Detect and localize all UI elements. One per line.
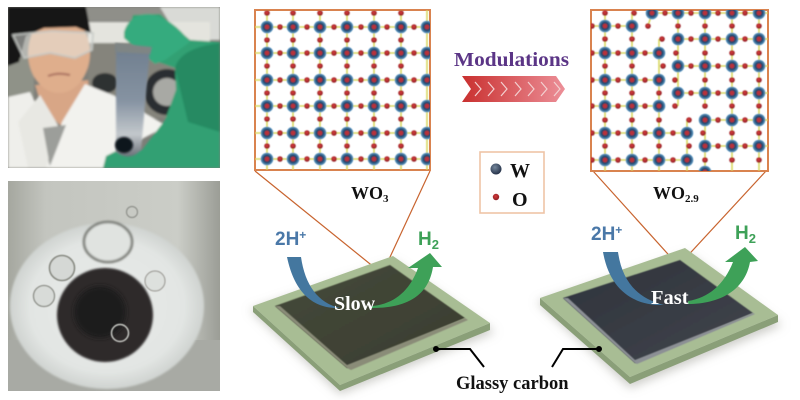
label: H2 left: H <box>418 229 432 250</box>
label: 2H+ right: 2H <box>591 224 615 245</box>
arrow: H2 outgoing slow <box>372 253 442 308</box>
legend: W and O atoms: O <box>512 189 528 211</box>
label: 2H+ left: 2H <box>275 229 299 250</box>
label: WO2.9: WO <box>653 183 685 203</box>
label: 2H+ right: + <box>615 223 622 237</box>
label: WO3: 3 <box>383 193 389 205</box>
label: Slow: Slow <box>334 293 376 315</box>
panel: WO2.9 lattice with vacancies <box>589 7 768 178</box>
legend: W and O atoms <box>480 152 544 213</box>
legend: W and O atoms: W <box>510 160 530 182</box>
label: WO2.9: 2.9 <box>685 193 699 205</box>
label: H2 right: H <box>735 223 749 244</box>
electrode: WO3 on glassy carbon <box>250 256 495 394</box>
photo: researcher holding a tube <box>8 7 220 168</box>
label: WO3: WO <box>351 183 383 203</box>
funnel connector lines <box>255 171 766 278</box>
leader line: right glassy carbon <box>552 347 601 367</box>
leader line: left glassy carbon <box>434 347 484 367</box>
label: H2 right: 2 <box>749 231 756 246</box>
label: Fast: Fast <box>651 287 689 309</box>
arrow: modulations chevrons <box>462 76 565 102</box>
arrow: H2 outgoing fast <box>688 247 758 304</box>
electrode: WO2.9 on glassy carbon <box>537 248 782 388</box>
photo: electrode with bubbles <box>8 181 220 391</box>
heading: Modulations: Modulations <box>454 49 569 71</box>
label: H2 left: 2 <box>432 237 439 252</box>
label: Glassy carbon: Glassy carbon <box>456 374 569 394</box>
panel: WO3 lattice <box>254 10 433 170</box>
label: 2H+ left: + <box>299 228 306 242</box>
arrow: 2H+ incoming fast <box>603 252 664 305</box>
arrow: 2H+ incoming slow <box>287 257 340 308</box>
